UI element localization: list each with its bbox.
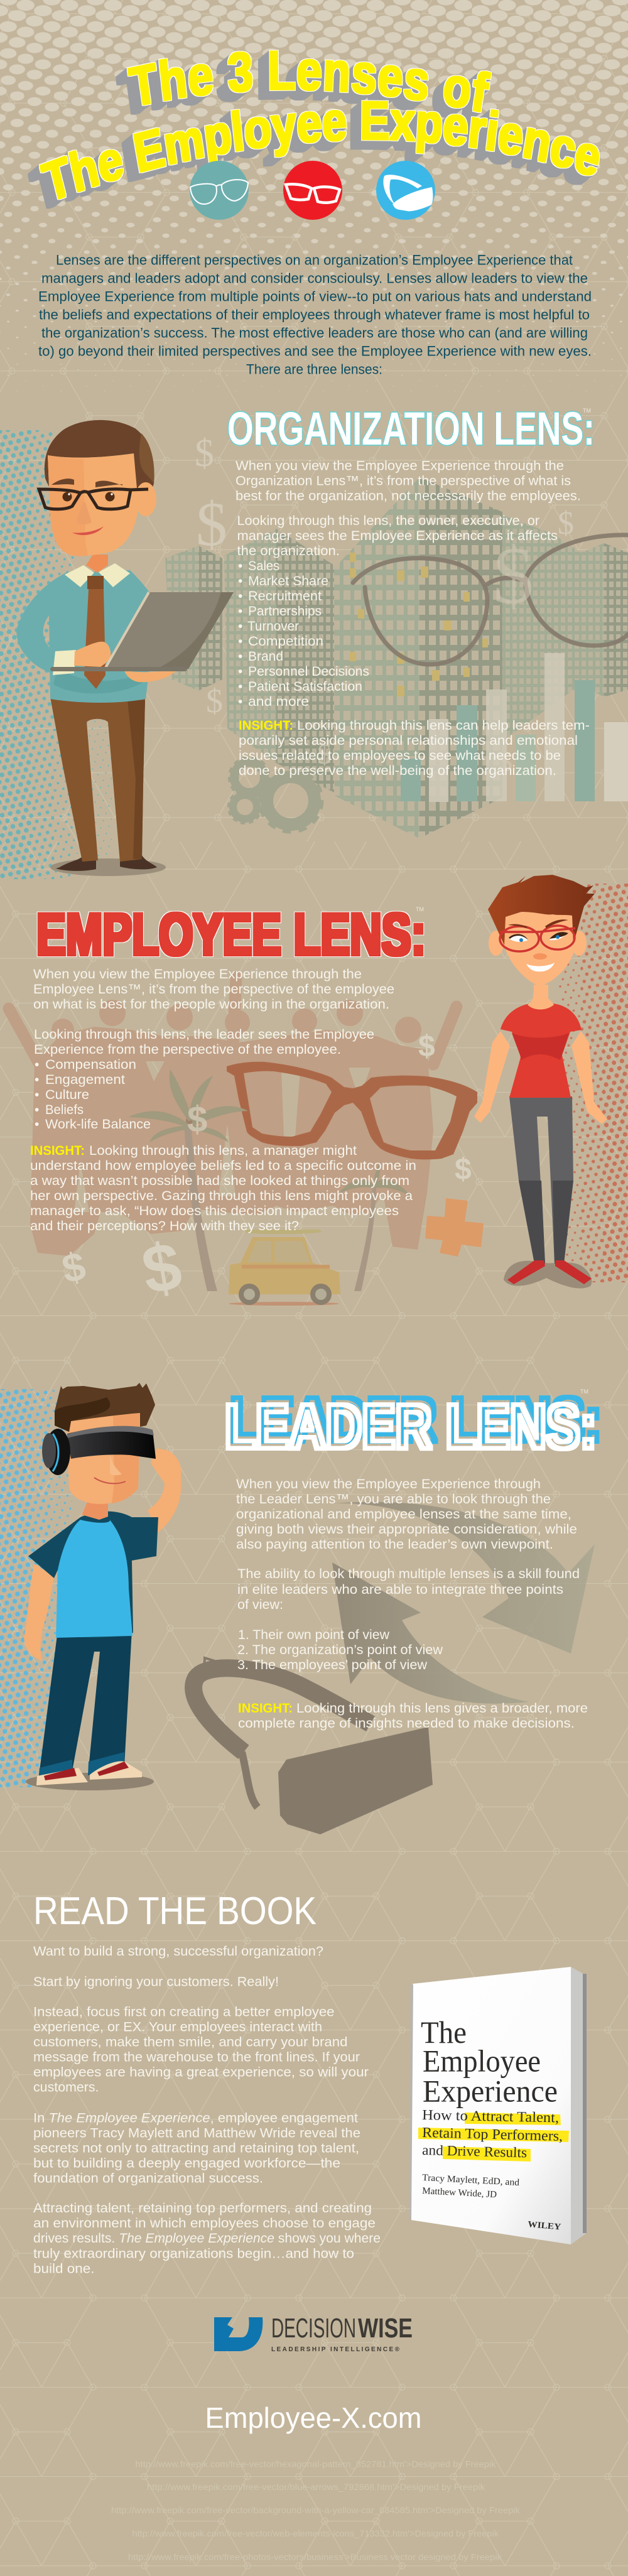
organization lens list: Partnerships — [248, 604, 322, 619]
image credits: http://www.freepik.com/free-photos-vectors/business'>Business vector designed by Freepik — [128, 2552, 502, 2562]
employee lens insight: and their perceptions? How with they see it? — [30, 1219, 299, 1233]
organization lens list: Recruitment — [248, 589, 322, 603]
organization lens list: Patient Satisfaction — [248, 679, 362, 694]
read the book copy: truly extraordinary organizations begin…and how to — [33, 2247, 354, 2261]
image credits: http://www.freepik.com/free-vector/background-with-a-yellow-car_884585.htm'>Designed by Freepik — [111, 2505, 521, 2515]
employee lens insight — [30, 1144, 416, 1233]
ghost artwork: city buildings, glasses, charts and gears — [165, 432, 628, 838]
read the book copy — [33, 1944, 381, 2276]
ghost artwork: city buildings, glasses, charts and gears: $ — [317, 738, 332, 770]
organization lens insight: issues related to employees to see what needs to be — [239, 749, 561, 763]
employee lens list: Compensation — [45, 1058, 136, 1072]
intro paragraph: to) go beyond their limited perspectives and see the Employee Experience with new eyes. — [38, 344, 592, 359]
employee lens insight: INSIGHT: — [30, 1144, 85, 1158]
employee lens description: Employee Lens™, it’s from the perspective of the employee — [33, 982, 394, 997]
organization lens list: • — [238, 604, 242, 619]
organization lens list: • — [238, 634, 242, 649]
employee lens list: Culture — [45, 1088, 89, 1102]
leader lens description: also paying attention to the leader’s own viewpoint. — [236, 1537, 553, 1552]
organization lens list: Sales — [248, 559, 279, 573]
book cover: The — [421, 2015, 467, 2050]
icon: organization glasses in teal circle — [190, 161, 249, 220]
leader lens insight: complete range of insights needed to make decisions. — [238, 1716, 575, 1731]
employee lens list: Experience from the perspective of the employee. — [34, 1042, 341, 1057]
image credits: http://www.freepik.com/free-vector/blue-arrows_792868.htm'>Designed by Freepik — [147, 2482, 485, 2492]
organization lens list: Looking through this lens, the owner, executive, or — [237, 514, 539, 528]
heading: organization lens: TM — [583, 408, 591, 414]
image credits — [111, 2459, 521, 2562]
intro paragraph: Employee Experience from multiple points of view--to put on various hats and understand — [38, 289, 592, 305]
ghost artwork: city buildings, glasses, charts and gears: $ — [195, 432, 214, 475]
organization lens insight: INSIGHT: — [239, 718, 293, 733]
employee lens list: Work-life Balance — [45, 1117, 151, 1132]
leader lens halftone panel — [0, 1389, 72, 1787]
read the book copy: secrets not only to attracting and retaining top talent, — [33, 2141, 359, 2155]
employee lens insight: her own perspective. Gazing through this lens might provoke a — [30, 1189, 413, 1203]
organization lens list: Turnover — [247, 619, 299, 634]
read the book copy: pioneers Tracy Maylett and Matthew Wride reveal the — [33, 2126, 360, 2140]
image credits: http://www.freepik.com/free-vector/web-elements-icons_713332.htm'>Designed by Freepik — [132, 2528, 499, 2538]
leader lens description: When you view the Employee Experience through — [236, 1477, 541, 1491]
ghost artwork: crowd, palm trees, car and big glasses: $ — [58, 1243, 89, 1292]
background: fading halftone dots — [0, 0, 628, 396]
organization lens list: • — [238, 664, 242, 679]
intro paragraph: Lenses are the different perspectives on an organization’s Employee Experience that — [56, 252, 573, 268]
employee lens description: When you view the Employee Experience through the — [33, 967, 362, 982]
icon: employee glasses in red circle — [283, 161, 342, 220]
character: woman with red glasses — [474, 875, 607, 1289]
leader lens numbered list — [237, 1628, 443, 1672]
read the book copy: employees are having a great experience, so will your — [33, 2065, 369, 2080]
organization lens list: • — [238, 695, 242, 709]
ghost artwork: crowd, palm trees, car and big glasses: $ — [418, 1030, 435, 1063]
book cover: and Drive Results — [422, 2142, 528, 2160]
organization lens halftone panel — [0, 430, 112, 879]
read the book copy: Instead, focus first on creating a better employee — [33, 2005, 334, 2020]
read the book copy: In The Employee Experience , employee engagement — [33, 2111, 358, 2125]
leader lens skill paragraph — [237, 1567, 580, 1612]
organization lens list — [237, 514, 558, 709]
employee lens list: Looking through this lens, the leader sees the Employee — [34, 1027, 374, 1042]
book cover: How to Attract Talent, — [422, 2107, 559, 2126]
read the book copy: foundation of organizational success. — [33, 2171, 263, 2185]
intro paragraph — [38, 252, 592, 377]
intro paragraph: managers and leaders adopt and consider conscioulsy. Lenses allow leaders to view the — [41, 271, 588, 286]
organization lens list: manager sees the Employee Experience as it affects — [237, 529, 558, 543]
character: man with laptop — [16, 420, 234, 876]
organization lens list: and more — [248, 695, 309, 709]
ghost artwork: city buildings, glasses, charts and gears: $ — [558, 506, 574, 541]
intro paragraph: There are three lenses: — [246, 362, 382, 377]
organization lens description: When you view the Employee Experience through the — [236, 458, 564, 473]
logo: DecisionWise: WISE — [358, 2313, 413, 2344]
organization lens list: Brand — [248, 649, 283, 664]
book cover: Tracy Maylett, EdD, and — [422, 2173, 520, 2188]
book cover: WILEY — [528, 2220, 561, 2232]
leader lens numbered list: 3. The employees’ point of view — [237, 1658, 428, 1672]
leader lens numbered list: 2. The organization’s point of view — [237, 1643, 443, 1657]
organization lens insight: porarily set aside personal relationships and emotional — [239, 733, 578, 748]
employee lens list: • — [35, 1117, 39, 1132]
intro paragraph: the beliefs and expectations of their employees through whatever frame is most helpful to — [39, 307, 590, 323]
leader lens insight: INSIGHT: — [238, 1701, 293, 1716]
heading: employee lens: EMPLOYEE LENS: — [36, 901, 426, 967]
organization lens description — [236, 458, 581, 503]
image credits: http://www.freepik.com/free-vector/hexagonal-pattern_852781.htm'>Designed by Freepik — [136, 2459, 497, 2469]
organization lens list: Personnel Decisions — [248, 664, 369, 679]
leader lens description: organizational and employee lenses at the same time, — [236, 1507, 571, 1522]
leader lens description: giving both views their appropriate consideration, while — [236, 1522, 577, 1537]
website link: Employee-X.com — [205, 2401, 422, 2434]
leader lens skill paragraph: of view: — [237, 1598, 283, 1612]
employee lens list: Engagement — [45, 1073, 125, 1087]
ghost artwork: city buildings, glasses, charts and gears: $ — [206, 682, 223, 720]
employee lens halftone panel — [559, 884, 628, 1282]
organization lens list: the organization. — [237, 544, 340, 558]
read the book copy: customers, make them smile, and carry your brand — [33, 2035, 348, 2050]
employee lens list: • — [35, 1073, 39, 1087]
title: The 3 Lenses of — [116, 50, 492, 121]
organization lens description: best for the organization, not necessarily the employees. — [236, 489, 581, 503]
ghost artwork: crowd, palm trees, car and big glasses: $ — [455, 1153, 472, 1186]
read the book copy: Attracting talent, retaining top performers, and creating — [33, 2201, 372, 2216]
logo: DecisionWise: LEADERSHIP INTELLIGENCE® — [271, 2346, 400, 2353]
logo: DecisionWise: DECISION — [271, 2313, 356, 2344]
heading: read the book: READ THE BOOK — [33, 1890, 317, 1933]
book cover: Matthew Wride, JD — [422, 2186, 497, 2200]
leader lens skill paragraph: The ability to look through multiple lenses is a skill found — [237, 1567, 580, 1581]
read the book copy: drives results. The Employee Experience shows you where — [33, 2231, 381, 2246]
employee lens description: on what is best for the people working in the organization. — [33, 997, 389, 1012]
ghost artwork: city buildings, glasses, charts and gears: $ — [196, 489, 227, 559]
organization lens list: • — [238, 589, 242, 603]
book cover — [410, 1967, 587, 2244]
organization lens list: Competition — [248, 634, 323, 649]
organization lens list: • — [238, 649, 242, 664]
employee lens insight: understand how employee beliefs led to a specific outcome in — [30, 1159, 416, 1173]
ghost artwork: city buildings, glasses, charts and gears: $ — [493, 531, 534, 621]
leader lens insight: Looking through this lens gives a broader, more — [296, 1701, 588, 1716]
heading: employee lens: TM — [416, 906, 424, 912]
organization lens list: • — [238, 679, 242, 694]
ghost artwork: city buildings, glasses, charts and gears: $ — [498, 745, 512, 777]
employee lens list: Beliefs — [45, 1103, 84, 1117]
employee lens list — [34, 1027, 374, 1132]
icon: virtual reality headset in blue circle — [376, 161, 435, 220]
organization lens insight: done to preserve the well-being of the organization. — [239, 764, 556, 778]
organization lens insight — [239, 718, 590, 778]
ghost artwork: crowd, palm trees, car and big glasses — [9, 977, 484, 1309]
character: boy with virtual reality visor — [24, 1383, 181, 1790]
logo: DecisionWise — [214, 2313, 413, 2353]
ghost artwork: crowd, palm trees, car and big glasses: $ — [136, 1227, 187, 1309]
ghost artwork: arrows and virtual reality headset — [193, 1502, 595, 1834]
read the book copy: experience, or EX. Your employees interact with — [33, 2020, 322, 2035]
read the book copy: but to building a deeply engaged workforce—the — [33, 2156, 340, 2170]
leader lens numbered list: 1. Their own point of view — [238, 1628, 390, 1642]
organization lens list: • — [238, 559, 242, 573]
organization lens insight: Looking through this lens can help leaders tem- — [297, 718, 590, 733]
read the book copy: an environment in which employees choose to engage — [33, 2216, 376, 2231]
ghost artwork: crowd, palm trees, car and big glasses: $ — [187, 1099, 207, 1140]
heading: leader lens: TM — [580, 1388, 588, 1395]
leader lens description: the Leader Lens™, you are able to look through the — [236, 1492, 551, 1507]
organization lens list: Market Share — [248, 574, 328, 588]
title: The Employee Experience — [28, 100, 600, 208]
employee lens list: • — [35, 1088, 39, 1102]
leader lens skill paragraph: in elite leaders who are able to integrate three points — [237, 1583, 563, 1597]
read the book copy: Start by ignoring your customers. Really! — [33, 1974, 279, 1989]
intro paragraph: the organization’s success. The most effective leaders are those who can (and are willing — [41, 325, 588, 341]
organization lens list: • — [238, 574, 242, 588]
book cover: Experience — [423, 2074, 558, 2109]
read the book copy: message from the warehouse to the front lines. If your — [33, 2050, 360, 2065]
employee lens insight: manager to ask, “How does this decision impact employees — [30, 1204, 399, 1218]
read the book copy: build one. — [33, 2262, 94, 2276]
leader lens insight — [238, 1701, 588, 1731]
employee lens insight: Looking through this lens, a manager might — [89, 1144, 357, 1158]
employee lens list: • — [35, 1058, 39, 1072]
employee lens description — [33, 967, 394, 1012]
leader lens description — [236, 1477, 577, 1552]
book cover: Employee — [423, 2043, 541, 2079]
organization lens list: • — [238, 619, 242, 634]
employee lens insight: a way that wasn’t possible had she looked at things only from — [30, 1174, 409, 1188]
employee lens list: • — [35, 1103, 39, 1117]
organization lens description: Organization Lens™, it’s from the perspective of what is — [236, 474, 571, 488]
read the book copy: customers. — [33, 2080, 99, 2095]
read the book copy: Want to build a strong, successful organization? — [33, 1944, 323, 1959]
book cover: Retain Top Performers, — [422, 2124, 563, 2144]
